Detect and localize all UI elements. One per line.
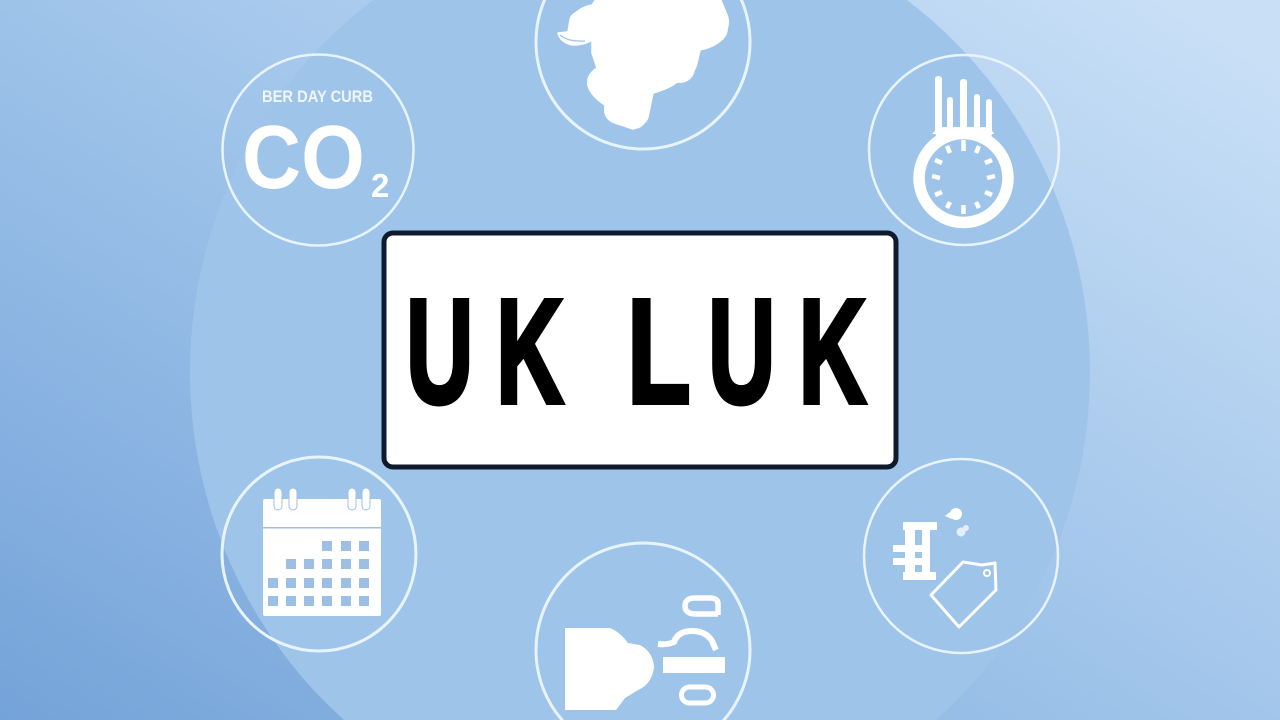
icon: CO2: 2 (371, 167, 389, 204)
plate text: U (708, 269, 775, 435)
icon: cloud (536, 0, 750, 149)
plate text: K (496, 269, 564, 435)
icon: CO2: CO (242, 107, 365, 208)
icon: calendar (222, 457, 416, 651)
icon: gauge with bars (869, 55, 1059, 245)
icon: CO2 (222, 54, 414, 246)
plate text (406, 269, 866, 435)
plate text: L (627, 270, 691, 435)
icon: CO2: BER DAY CURB (262, 87, 373, 106)
central plate (384, 233, 896, 467)
large central circle (190, 0, 1090, 720)
plate text: K (799, 269, 866, 435)
plate text: U (406, 269, 473, 435)
icon: currency and price tag (864, 459, 1058, 653)
icon: exhaust emission (536, 543, 750, 720)
